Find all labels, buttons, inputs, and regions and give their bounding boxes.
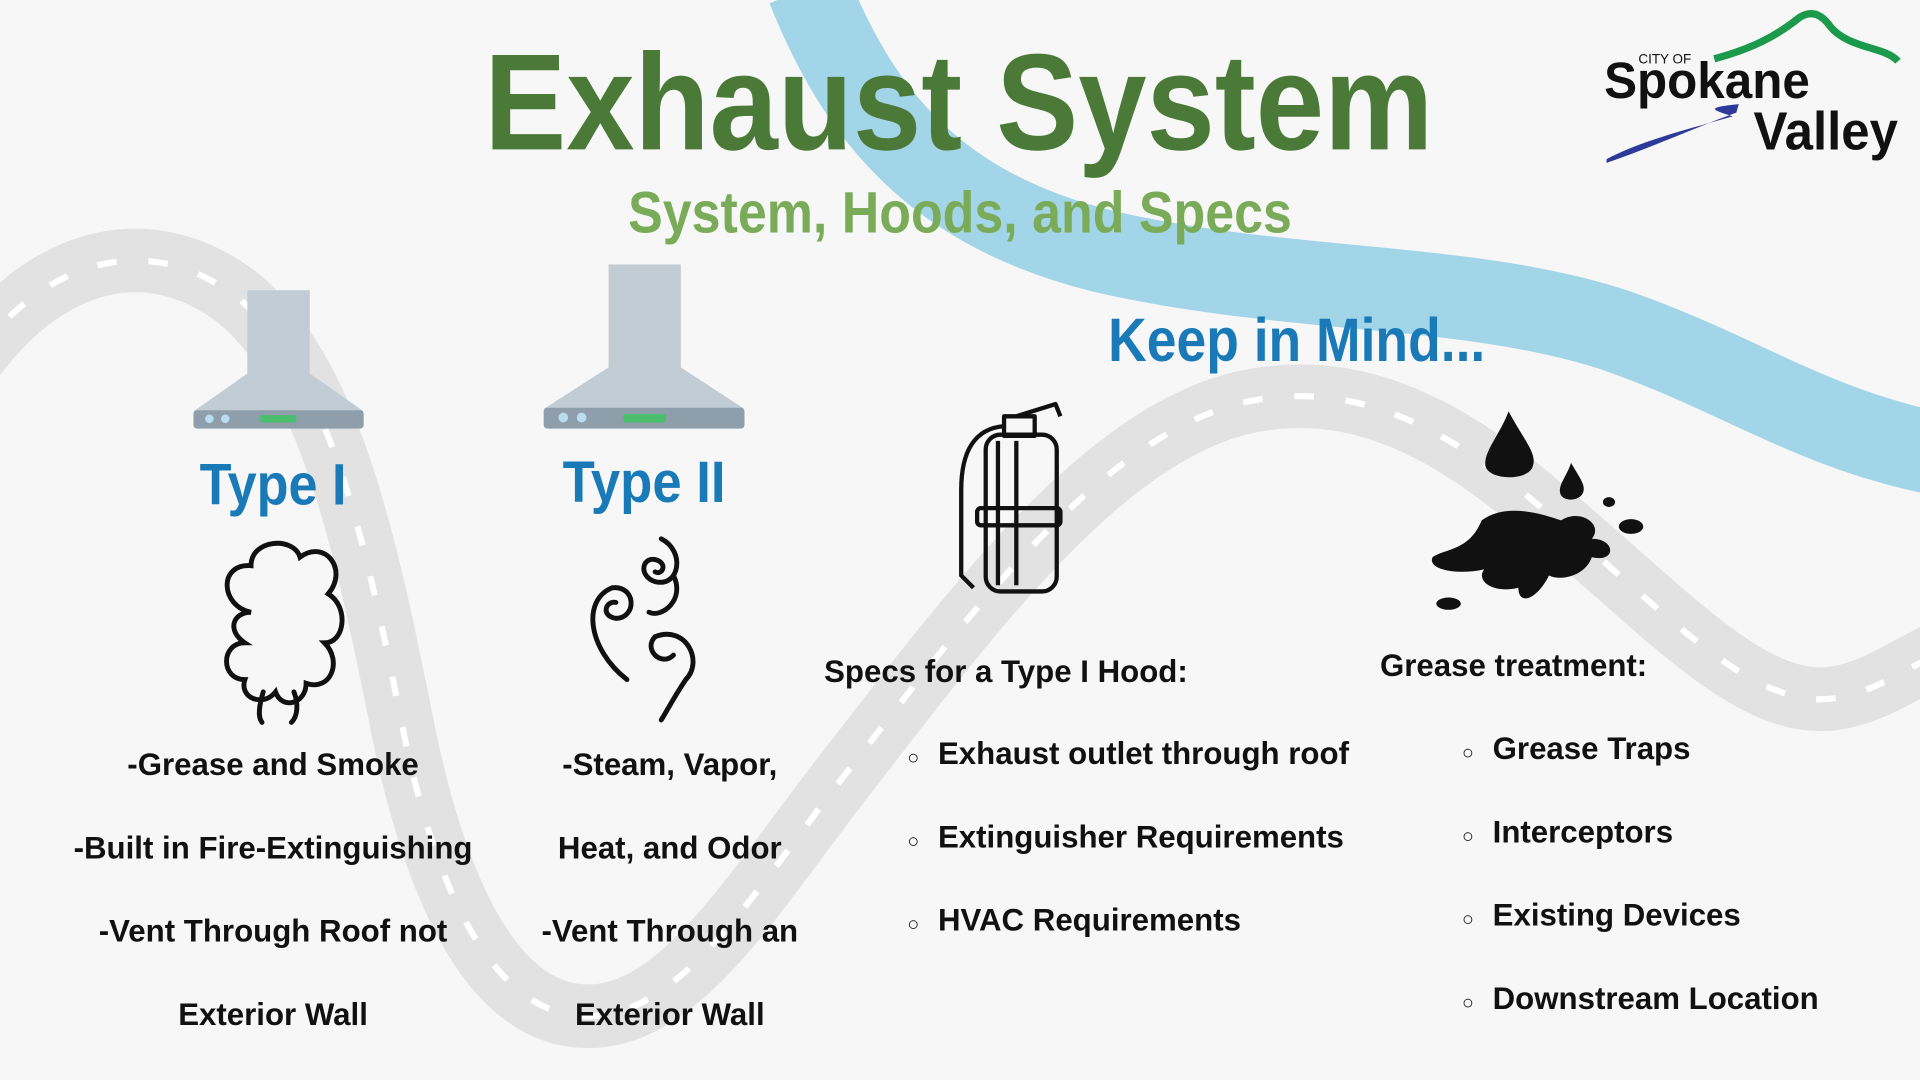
text: specs list: Extinguisher Requirements xyxy=(938,819,1344,854)
text: specs list: ○ xyxy=(907,830,919,852)
text: grease list xyxy=(1380,648,1819,1016)
text: grease list: Downstream Location xyxy=(1493,981,1819,1016)
logo xyxy=(1604,14,1898,163)
text: type I list: -Vent Through Roof not xyxy=(99,914,448,949)
text: grease list: Existing Devices xyxy=(1493,898,1741,933)
heading: Type I: Type I xyxy=(200,452,347,517)
text: specs list: Specs for a Type I Hood: xyxy=(824,654,1188,689)
text: grease list: ○ xyxy=(1462,825,1474,847)
hood: type I xyxy=(193,290,364,429)
heading: Type II: Type II xyxy=(563,450,726,515)
text: specs list: HVAC Requirements xyxy=(938,903,1241,938)
subtitle: System, Hoods, and Specs xyxy=(628,181,1292,246)
text: grease list: ○ xyxy=(1462,742,1474,764)
text: type I list: -Built in Fire-Extinguishing xyxy=(74,830,473,865)
text: grease list: ○ xyxy=(1462,992,1474,1014)
text: type I list xyxy=(74,747,473,1032)
text: type I list: Exterior Wall xyxy=(178,997,368,1032)
text: specs list: ○ xyxy=(907,747,919,769)
text: grease list: ○ xyxy=(1462,909,1474,931)
river xyxy=(808,0,1920,453)
text: grease list: Interceptors xyxy=(1493,814,1673,849)
icon: steam swirls xyxy=(593,539,693,720)
text: type II list: Heat, and Odor xyxy=(558,830,782,865)
text: grease list: Grease Traps xyxy=(1493,731,1691,766)
text: type II list: -Steam, Vapor, xyxy=(562,747,777,782)
logo: Valley xyxy=(1753,101,1898,161)
heading: keep in mind: Keep in Mind... xyxy=(1108,306,1485,374)
icon: grease splash xyxy=(1432,411,1643,610)
text: type II list xyxy=(541,747,798,1032)
text: specs list: Exhaust outlet through roof xyxy=(938,736,1350,771)
text: grease list: Grease treatment: xyxy=(1380,648,1647,683)
icon: fire extinguisher xyxy=(961,404,1060,591)
logo: CITY OF xyxy=(1638,52,1691,67)
logo: Spokane xyxy=(1604,51,1810,109)
road xyxy=(0,260,1920,1016)
text: type I list: -Grease and Smoke xyxy=(127,747,419,782)
text: type II list: -Vent Through an xyxy=(541,914,798,949)
hood: type II xyxy=(544,264,744,429)
text: specs list xyxy=(824,654,1350,938)
icon: smoke cloud xyxy=(227,543,342,722)
title: Exhaust System xyxy=(484,26,1433,179)
text: type II list: Exterior Wall xyxy=(575,997,765,1032)
text: specs list: ○ xyxy=(907,914,919,936)
